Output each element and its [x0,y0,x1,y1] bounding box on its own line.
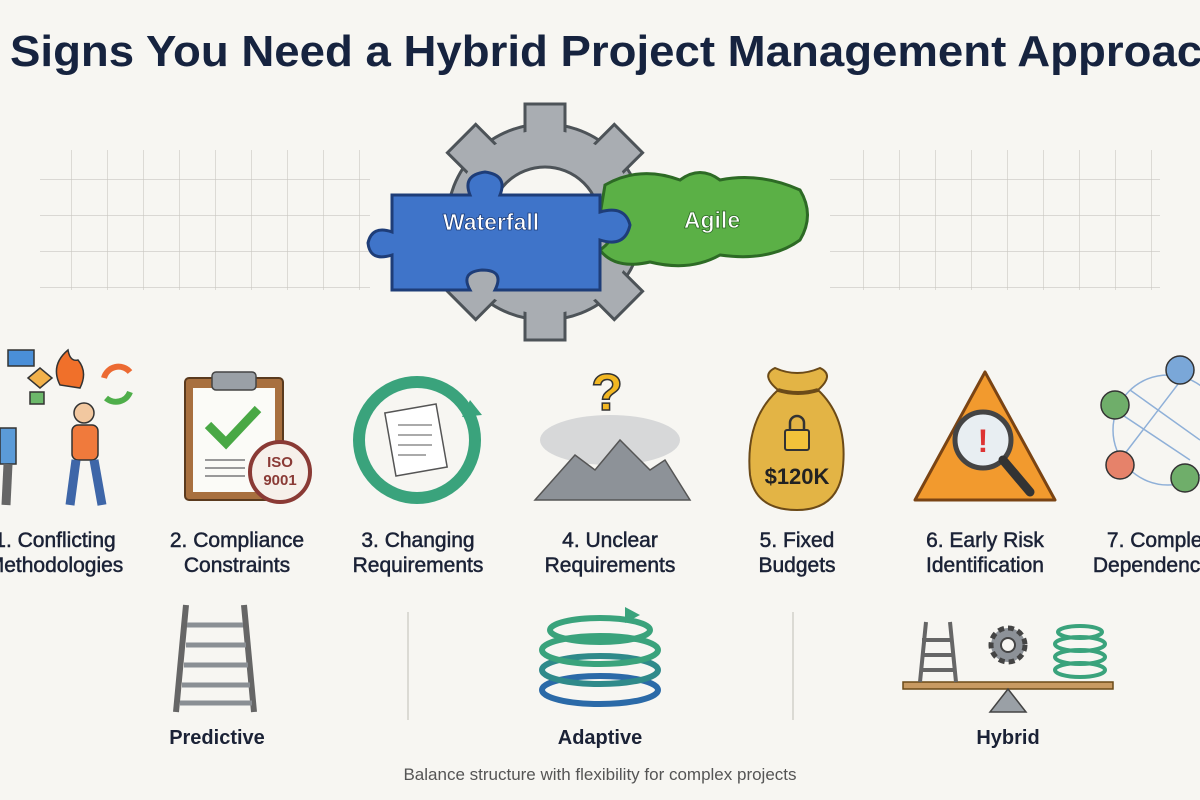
bottom: predictive ladder: Predictive [169,727,265,749]
sign 2: compliance constraints: 9001 [263,472,297,489]
sign 5: fixed budgets: $120K [765,464,830,489]
sign 3: changing requirements: Requirements [353,554,483,577]
label: 2. Compliance [170,529,304,552]
label: 4. Unclear [562,529,658,552]
bottom: adaptive spring [542,607,658,749]
hero: puzzle and gear [368,104,808,340]
sign 2: compliance constraints: Constraints [184,554,290,577]
bottom: adaptive spring: Adaptive [558,727,642,749]
sign 1: conflicting methodologies [0,350,130,577]
sign 5: fixed budgets [749,368,844,577]
icon: puzzle piece agile [600,172,808,266]
sign 4: unclear requirements: Requirements [545,554,675,577]
title: 7 Signs You Need a Hybrid Project Management Approach [0,27,1200,76]
sign 4: unclear requirements: ? [591,364,623,422]
hero: puzzle and gear: Waterfall [443,209,539,235]
bottom: hybrid seesaw [903,622,1113,749]
sign 4: unclear requirements [535,364,690,577]
label: 3. Changing [361,529,475,552]
sign 6: early risk identification: Identification [926,554,1044,577]
caption: Balance structure with flexibility for complex projects [403,765,797,784]
sign 2: compliance constraints: ISO [267,454,293,471]
sign 2: compliance constraints [170,372,310,577]
icon: gear [427,104,663,340]
icon: puzzle piece waterfall [368,172,630,290]
sign 6: early risk identification: ! [978,423,988,459]
label: 5. Fixed [760,529,834,552]
hero: puzzle and gear: Agile [684,207,740,233]
bottom: hybrid seesaw: Hybrid [976,727,1040,749]
sign 6: early risk identification [915,372,1055,577]
bottom: predictive ladder [169,605,265,749]
sign 3: changing requirements [353,382,483,577]
label: 6. Early Risk [926,529,1044,552]
sign 7: complex dependencies [1093,356,1200,577]
sign 5: fixed budgets: Budgets [758,554,836,577]
